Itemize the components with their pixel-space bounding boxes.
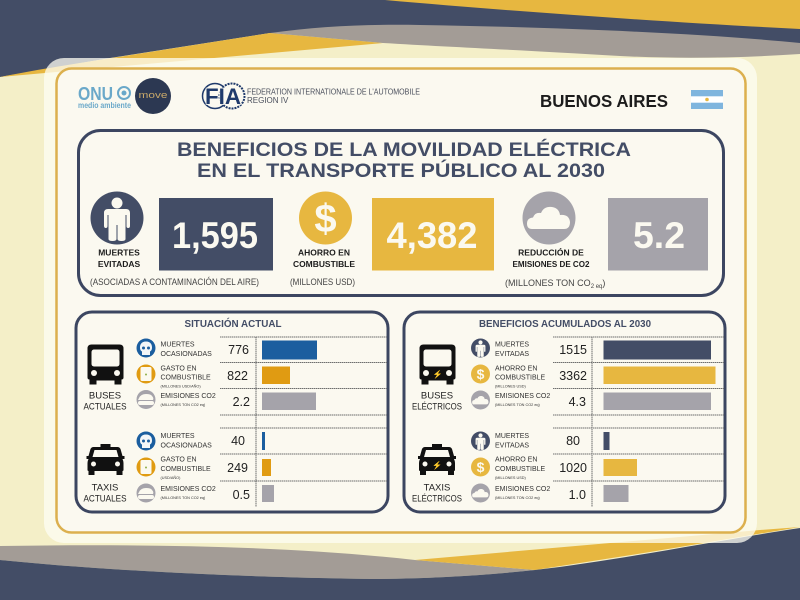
caption: deaths avoided: (ASOCIADAS A CONTAMINACIÓN DEL AIRE) [90,277,259,287]
label: buses: ACTUALES [84,402,126,412]
labels: electric bus row: MUERTES [495,342,529,348]
labels: bus row: COMBUSTIBLE [160,374,211,382]
labels: electric taxi row: (MILLONES USD) [495,476,527,480]
labels: electric bus row: (MILLONES USD) [495,384,527,388]
label: taxis [84,482,126,504]
icon: taxi [86,444,124,475]
labels: electric bus row: EVITADAS [495,351,529,358]
caption: emissions: ) [602,278,605,288]
panel: current situation [76,312,388,512]
label: deaths avoided: EVITADAS [98,259,140,269]
labels: taxi row: (USD/AÑO) [160,475,181,480]
labels: electric taxi row: COMBUSTIBLE [495,466,546,473]
values: 776 [228,343,249,357]
values: 249 [227,461,248,475]
labels: bus row: (MILLONES USD/AÑO) [160,384,201,388]
values [559,343,587,502]
values: 3362 [559,369,587,383]
values: 80 [566,434,580,448]
stat: emissions [608,198,708,270]
labels: electric taxi row: AHORRO EN [495,456,537,464]
icon: electric bus [420,344,456,384]
icon: person [90,192,144,244]
labels: bus row: MUERTES [160,342,195,348]
label: buses [84,390,126,412]
labels: electric taxi row [495,433,550,500]
stat: deaths avoided: 1,595 [172,215,258,256]
label: electric taxis: TAXIS [424,482,450,494]
logo: move [135,78,171,114]
icon: electric taxi [418,444,456,475]
labels: bus row: GASTO EN [160,366,197,372]
panel: accumulated benefits [404,312,725,512]
labels: electric taxi row: MUERTES [495,433,529,440]
labels: taxi row: OCASIONADAS [160,442,212,450]
stat: fuel savings [372,198,494,270]
labels: electric bus row: COMBUSTIBLE [495,374,546,382]
heading: SITUACIÓN ACTUAL [184,317,282,330]
title: BENEFICIOS DE LA MOVILIDAD ELÉCTRICA [177,138,631,161]
label: deaths avoided [98,248,140,269]
label: fuel savings: AHORRO EN [298,248,350,258]
bar chart [262,340,317,502]
bar chart [604,340,716,502]
heading: BENEFICIOS ACUMULADOS AL 2030 [479,318,651,330]
values: 4.3 [569,395,586,409]
icon: dollar: $ [314,197,337,241]
labels: bus row [160,342,216,407]
label: electric buses: BUSES [421,390,453,402]
flag: Argentina [691,90,723,109]
federation text [247,88,420,105]
labels: taxi row: GASTO EN [160,456,197,464]
title [177,138,631,182]
labels: electric bus row: (MILLONES TON CO2 eq) [495,403,541,407]
label: electric taxis [412,482,462,504]
label: emissions: EMISIONES DE CO2 [512,259,590,269]
values: 0.5 [233,488,250,502]
labels: taxi row: MUERTES [160,433,195,440]
label: emissions: REDUCCIÓN DE [518,246,584,258]
caption: fuel savings: (MILLONES USD) [290,277,355,287]
icon: cloud [522,192,576,244]
labels: electric bus row: AHORRO EN [495,366,537,372]
icon: bus [88,344,124,384]
icons: bus row [136,338,156,409]
label: electric buses: ELÉCTRICOS [412,402,462,412]
labels: electric taxi row: EMISIONES CO2 [495,486,550,493]
icons: electric taxi row: $ [477,459,485,475]
values: 1020 [559,461,587,475]
logo: move: move [138,90,168,100]
logo: FIA: FIA [205,84,241,109]
icon: electric taxi: ⚡ [432,460,442,470]
labels: electric bus row [495,342,550,407]
values: 1515 [559,343,587,357]
label: emissions [512,246,590,269]
values: 2.2 [233,395,250,409]
labels: electric taxi row: EVITADAS [495,442,529,450]
values [227,343,250,502]
values: 822 [227,369,248,383]
icons: electric taxi row [471,432,490,502]
label: taxis: TAXIS [92,482,118,494]
icons: taxi row [136,432,156,502]
title: EN EL TRANSPORTE PÚBLICO AL 2030 [197,158,605,182]
label: buses: BUSES [89,390,121,402]
values: 40 [231,434,245,448]
icon: dollar [299,192,352,244]
icons: electric bus row [471,338,490,410]
caption: emissions: 2 eq [591,284,602,290]
federation text: REGION IV [247,96,289,105]
label: fuel savings [293,248,355,269]
labels: taxi row: (MILLONES TON CO2 eq) [160,496,206,500]
labels: taxi row: EMISIONES CO2 [160,486,216,493]
labels: taxi row [160,433,216,500]
labels: bus row: OCASIONADAS [160,351,212,358]
caption: emissions: (MILLONES TON CO [505,278,591,288]
labels: electric bus row: EMISIONES CO2 [495,393,550,400]
label: fuel savings: COMBUSTIBLE [293,259,355,269]
stat: fuel savings: 4,382 [386,215,478,256]
panel: main benefits [78,130,724,296]
label: electric taxis: ELÉCTRICOS [412,494,462,504]
logo: ONU medio ambiente [78,83,131,110]
labels: taxi row: COMBUSTIBLE [160,466,211,473]
labels: bus row: (MILLONES TON CO2 eq) [160,403,206,407]
stat: emissions: 5.2 [633,215,685,256]
icons: electric bus row: $ [477,366,485,382]
logo: ONU medio ambiente: medio ambiente [78,100,131,110]
city name: BUENOS AIRES [540,91,668,111]
label: taxis: ACTUALES [84,494,126,504]
federation text: FEDERATION INTERNATIONALE DE L'AUTOMOBILE [247,88,420,96]
labels: bus row: EMISIONES CO2 [160,393,216,400]
icon: electric bus: ⚡ [433,369,442,379]
logo: ONU medio ambiente: ONU [78,83,113,104]
label: electric buses [412,390,462,412]
labels: electric taxi row: (MILLONES TON CO2 eq) [495,496,541,500]
card border [56,68,746,532]
card [44,58,757,543]
label: deaths avoided: MUERTES [98,248,140,258]
values: 1.0 [569,488,586,502]
stat: deaths avoided [159,198,273,270]
